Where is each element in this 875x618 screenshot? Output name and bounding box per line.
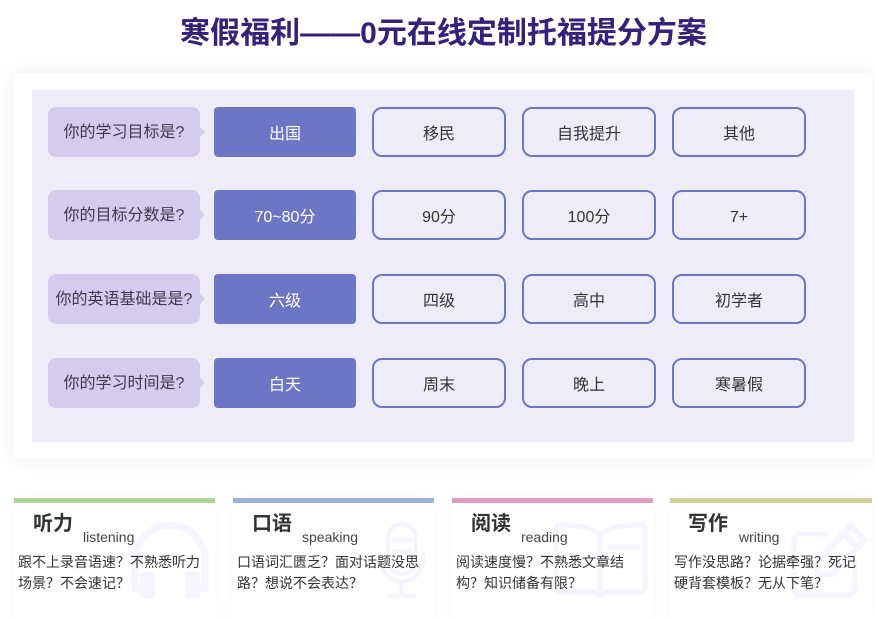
option: 90分 — [422, 209, 456, 226]
description: 阅读速度慢？不熟悉文章结构？知识储备有限？ — [456, 554, 624, 591]
question bubble — [48, 107, 200, 157]
option: 移民 — [423, 126, 455, 143]
inner lilac panel — [32, 90, 854, 442]
question bubble — [48, 274, 200, 324]
question bubble — [48, 190, 200, 240]
heading: 阅读 — [471, 513, 511, 535]
heading: 口语 — [252, 513, 292, 535]
option — [522, 358, 656, 408]
option selected — [214, 190, 356, 240]
option selected: 白天 — [269, 377, 301, 394]
option — [672, 107, 806, 157]
row: study time — [48, 358, 806, 408]
option selected: 六级 — [269, 293, 301, 310]
option: 100分 — [568, 209, 610, 226]
description: 写作没思路？论据牵强？死记硬背套模板？无从下笔？ — [674, 554, 856, 591]
panel: listening — [14, 498, 215, 618]
option selected: 出国 — [269, 126, 301, 143]
English label: speaking — [302, 529, 358, 545]
question bubble — [48, 358, 200, 408]
option: 自我提升 — [557, 126, 621, 143]
panel: reading — [452, 498, 653, 618]
description: 跟不上录音语速？不熟悉听力场景？不会速记？ — [18, 554, 200, 591]
option: 晚上 — [573, 377, 605, 394]
option — [522, 107, 656, 157]
description: 口语词汇匮乏？面对话题没思路？想说不会表达？ — [237, 554, 419, 591]
English label: reading — [521, 529, 568, 545]
icon: pencil and paper — [792, 522, 868, 598]
option selected — [214, 274, 356, 324]
panel: writing — [670, 498, 872, 618]
option: 初学者 — [715, 293, 763, 310]
option — [672, 274, 806, 324]
option — [672, 190, 806, 240]
option selected — [214, 358, 356, 408]
English label: writing — [739, 529, 779, 545]
question bubble: 你的英语基础是是? — [56, 291, 192, 308]
heading: 听力 — [33, 513, 73, 535]
icon: open book — [554, 522, 648, 598]
option — [672, 358, 806, 408]
icon: headphones — [132, 522, 208, 598]
option: 7+ — [730, 209, 748, 226]
option — [372, 358, 506, 408]
icon: microphone — [378, 522, 425, 598]
option selected: 70~80分 — [255, 209, 315, 226]
English label: listening — [83, 529, 134, 545]
row: study goal — [48, 107, 806, 157]
row: English level — [48, 274, 806, 324]
option — [372, 107, 506, 157]
option — [372, 190, 506, 240]
title: 寒假福利——0元在线定制托福提分方案 — [180, 17, 707, 50]
option — [522, 190, 656, 240]
option: 寒暑假 — [715, 377, 763, 394]
option: 四级 — [423, 293, 455, 310]
option: 高中 — [573, 293, 605, 310]
option: 周末 — [423, 377, 455, 394]
panel: speaking — [233, 498, 434, 618]
option — [522, 274, 656, 324]
panel: questionnaire — [14, 73, 872, 459]
question bubble: 你的学习时间是? — [64, 375, 184, 392]
option: 其他 — [723, 126, 755, 143]
heading: 写作 — [688, 513, 728, 535]
row: target score — [48, 190, 806, 240]
question bubble: 你的学习目标是? — [64, 124, 184, 141]
question bubble: 你的目标分数是? — [64, 207, 184, 224]
option selected — [214, 107, 356, 157]
option — [372, 274, 506, 324]
